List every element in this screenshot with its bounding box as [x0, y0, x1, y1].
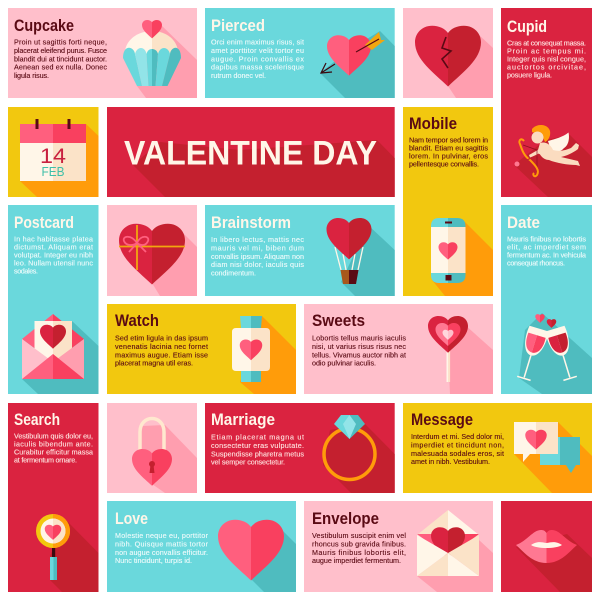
text: mobile body: Nam tempor sed lorem in — [409, 136, 488, 144]
text: date body: fermentum ac. In vehicula — [507, 250, 586, 260]
panel: date — [501, 205, 592, 394]
text: date 14: 14 — [40, 145, 66, 168]
text: cupid body: auctortos orcivitae, — [507, 62, 586, 72]
panel: broken heart — [403, 8, 493, 98]
text: date body — [507, 234, 586, 268]
text: date body: elit, ac imperdiet sem — [507, 242, 586, 252]
text: sweets body: tellus. Vivamus auctor nibh at — [312, 350, 406, 359]
text: mobile body — [409, 136, 488, 168]
text: search body: at fermentum ornare. — [14, 456, 77, 464]
heading: Cupid: Cupid — [507, 18, 547, 36]
heading: Love: Love — [115, 510, 148, 528]
heading: Brainstorm: Brainstorm — [211, 214, 291, 232]
text: marriage body: Suspendisse pharetra metus — [211, 449, 304, 458]
panel: heart lock — [107, 403, 197, 493]
text: watch body: maximus augue. Etiam isse — [115, 350, 208, 359]
panel: brainstorm — [205, 205, 395, 296]
text: postcard body: In hac habitasse platea — [14, 234, 93, 244]
text: postcard body: leo. Nullam utensil nunc — [14, 258, 93, 268]
icon: envelope with heart — [417, 510, 479, 576]
heading: Date: Date — [507, 214, 540, 232]
text: love body: Molestie neque eu, porttitor — [115, 531, 209, 540]
icon: envelope with heart letter — [22, 314, 84, 379]
text: watch body — [115, 334, 208, 368]
heading: Message: Message — [411, 411, 473, 429]
text: love body: Nunc tincidunt, turpis id. — [115, 556, 192, 565]
text: envelope body: Vestibulum suscipit enim vel — [312, 531, 406, 540]
text: search body: iaculis bibendum ante. — [14, 440, 93, 448]
text: pierced body: dapibus massa scelerisque — [211, 62, 304, 72]
text: postcard body: dictumst. Aliquam erat — [14, 242, 93, 252]
icon: gift heart — [119, 224, 185, 285]
text: envelope body: augue imperdiet fermentum. — [312, 556, 401, 565]
heading: Marriage: Marriage — [211, 411, 275, 429]
heading: Pierced: Pierced — [211, 17, 265, 35]
text: postcard body: sodales. — [14, 266, 38, 276]
panel: calendar — [8, 107, 98, 197]
text: brainstorm body: diam nisi dolor, iaculis quis — [211, 260, 304, 269]
text: sweets body: odio pulvinar iaculis. — [312, 358, 376, 368]
text: message body: malesuada sodales eros, sit — [411, 449, 504, 458]
text: love body: nibh. Quisque mattis tortor — [115, 540, 209, 548]
text: search body: Vestibulum quis dolor eu, — [14, 432, 93, 440]
text: love body — [115, 531, 209, 565]
text: cupid body: posuere ligula. — [507, 70, 552, 80]
panel: envelope — [304, 501, 493, 592]
text: mobile body: pellentesque convallis. — [409, 160, 479, 168]
text: pierced body: rutrum donec vel. — [211, 71, 266, 80]
panel: marriage — [205, 403, 395, 493]
text: sweets body: nisi, ut varius risus risus nec — [312, 342, 406, 351]
text: cupcake body: blandit dui at tincidunt auctor. — [14, 54, 107, 63]
text: brainstorm body — [211, 235, 304, 278]
text: search body — [14, 432, 93, 464]
text: message body: imperdiet et tincidunt non, — [411, 440, 504, 450]
text: FEB: FEB — [42, 165, 64, 179]
text: pierced body — [211, 38, 304, 80]
icon: cupid — [514, 125, 580, 176]
text: watch body: placerat magna util eras. — [115, 358, 193, 368]
panel: title — [107, 107, 395, 197]
heading: Cupcake: Cupcake — [14, 17, 74, 35]
panel: postcard — [8, 205, 98, 394]
heading: Sweets: Sweets — [312, 312, 365, 330]
text: sweets body — [312, 334, 406, 368]
text: marriage body — [211, 432, 304, 466]
icon: calendar — [20, 119, 86, 181]
panel: lips — [501, 501, 592, 592]
icon: diamond ring — [324, 415, 375, 480]
text: love body: non augue convallis efficitur. — [115, 548, 208, 557]
heading: Watch: Watch — [115, 312, 159, 330]
heading: Search: Search — [14, 411, 60, 429]
text: cupcake body: ligula risus. — [14, 71, 49, 80]
icon: heart balloon — [326, 218, 372, 284]
panel: love — [107, 501, 296, 592]
text: postcard body — [14, 234, 93, 276]
text: brainstorm body: mauris vel mi, biben dum — [211, 243, 304, 252]
text: cupcake body: Aenean sed ex nulla. Donec — [14, 62, 107, 72]
panel: pierced — [205, 8, 395, 98]
text: cupcake body — [14, 38, 107, 80]
text: cupid body: Proin ac tempus mi. — [507, 46, 586, 56]
panel: watch — [107, 304, 296, 394]
icon: broken heart — [415, 26, 481, 87]
text: pierced body: augue. Proin convallis ex — [211, 54, 304, 63]
text: marriage body: vel semper consectetur. — [211, 458, 285, 466]
text: cupid body — [507, 38, 586, 80]
icon: heart lollipop — [428, 316, 468, 382]
text: message body — [411, 432, 504, 466]
icon: cupcake — [123, 20, 181, 86]
text: message body: Interdum et mi. Sed dolor mi, — [411, 432, 504, 441]
text: date body: Mauris finibus no lobortis — [507, 234, 586, 244]
text: date body: consequat rhoncus. — [507, 258, 565, 268]
panel: gift heart — [107, 205, 197, 296]
heading: Mobile: Mobile — [409, 115, 457, 133]
text: cupid body: Integer quis nisl congue, — [507, 54, 586, 64]
icon: magnifying glass — [36, 514, 70, 580]
panel: cupid — [501, 8, 592, 197]
icon: smartphone — [431, 218, 466, 283]
text: envelope body: rhoncus sub gravida finibus. — [312, 540, 406, 548]
text: cupcake body: Proin ut sagittis forti neque, — [14, 38, 107, 46]
text: message body: amet in nibh. Vestibulum. — [411, 457, 490, 466]
text: envelope body: Mauris finibus lobortis elit, — [312, 548, 406, 557]
text: watch body: venenatis lacinia nec fornet — [115, 342, 208, 351]
icon: wine glasses with hearts — [514, 314, 580, 381]
panel: search — [8, 403, 98, 592]
text: brainstorm body: condimentum. — [211, 268, 256, 278]
text: brainstorm body: In libero lectus, mattis nec — [211, 235, 304, 244]
heading: Envelope: Envelope — [312, 510, 379, 528]
text: sweets body: Lobortis tellus mauris iaculis — [312, 334, 406, 342]
panel: sweets — [304, 304, 493, 394]
icon: heart padlock — [132, 418, 172, 486]
text: pierced body: amet porttitor velit tortor eu — [211, 46, 304, 55]
icon: smartwatch — [232, 316, 270, 382]
text: postcard body: volutpat. Integer eu nibh — [14, 250, 93, 260]
text: brainstorm body: convallis ipsum. Aliquam non — [211, 252, 304, 261]
panel: message — [403, 403, 592, 493]
panel: cupcake — [8, 8, 197, 98]
icon: lips — [516, 530, 577, 563]
heading: Postcard: Postcard — [14, 214, 74, 232]
heading: VALENTINE DAY: VALENTINE DAY — [124, 134, 377, 172]
text: search body: Curabitur efficitur massa — [14, 448, 93, 456]
text: cupid body: Cras at consequat massa. — [507, 38, 586, 48]
text: cupcake body: placerat eleifend purus. Fusce — [14, 46, 107, 55]
panel: mobile — [403, 107, 493, 296]
text: mobile body: blandit. Etiam eu sagittis — [409, 144, 488, 152]
icon: big heart — [218, 520, 284, 581]
text: watch body: Sed etim ligula in das ipsum — [115, 334, 208, 342]
icon: pierced heart with arrow — [321, 32, 385, 76]
text: envelope body — [312, 531, 406, 565]
icon: speech bubbles with heart — [514, 422, 580, 473]
text: marriage body: Etiam placerat magna ut — [211, 432, 304, 442]
text: pierced body: Orci enim maximus risus, sit — [211, 38, 304, 46]
text: marriage body: consectetur eras vulputate. — [211, 441, 304, 450]
text: mobile body: lorem. In pulvinar, eros — [409, 152, 488, 160]
